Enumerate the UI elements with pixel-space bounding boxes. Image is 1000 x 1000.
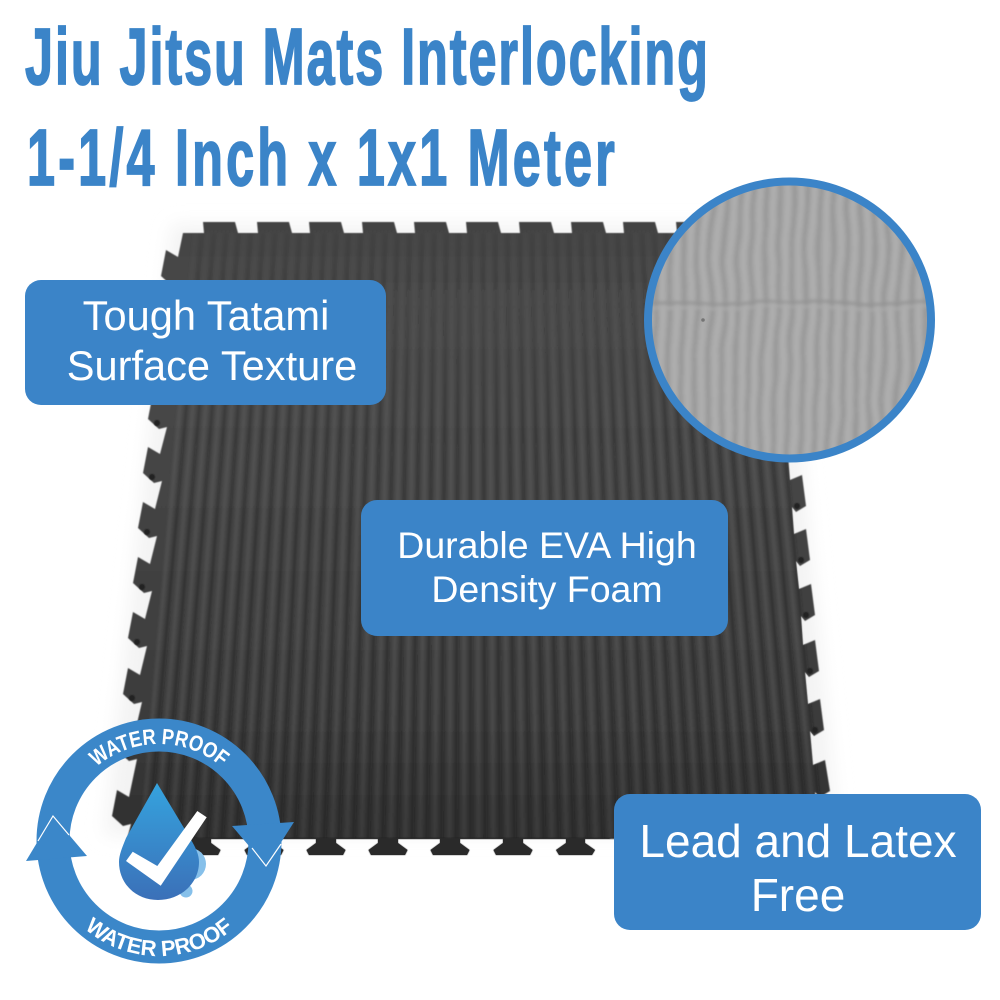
magnified texture circle xyxy=(644,178,935,462)
blue circle border xyxy=(648,182,931,458)
callout: EVA foam: Density Foam xyxy=(431,568,663,610)
mat body with puzzle edges xyxy=(112,222,830,855)
callout: lead and latex free: Lead and Latex xyxy=(639,815,957,867)
mat tatami ribs xyxy=(144,346,820,855)
callout: EVA foam: Durable EVA High xyxy=(397,524,697,566)
water proof label top: WATER PROOF xyxy=(87,728,230,765)
icon: small droplets xyxy=(174,848,206,898)
title xyxy=(25,12,708,203)
title line 2: 1-1/4 Inch x 1x1 Meter xyxy=(27,113,615,203)
icon: water drop xyxy=(119,783,199,900)
water proof badge xyxy=(26,718,294,964)
callout: EVA foam xyxy=(361,500,728,636)
callout: tatami surface: Tough Tatami xyxy=(83,292,329,339)
callout: tatami surface: Surface Texture xyxy=(67,342,357,389)
arrow: left, pointing up xyxy=(26,816,87,861)
circular ring xyxy=(53,735,265,947)
icon: check mark xyxy=(126,811,207,886)
water proof label bottom: WATER PROOF xyxy=(88,916,230,956)
title line 1: Jiu Jitsu Mats Interlocking xyxy=(25,12,708,102)
mat tab shadows xyxy=(124,420,818,758)
interlocking mat xyxy=(110,222,830,858)
arrow: right, pointing down xyxy=(232,822,294,866)
texture fill xyxy=(652,186,927,454)
callout: lead and latex free xyxy=(614,794,981,930)
callout: lead and latex free: Free xyxy=(751,869,845,921)
callout: tatami surface xyxy=(25,280,386,405)
